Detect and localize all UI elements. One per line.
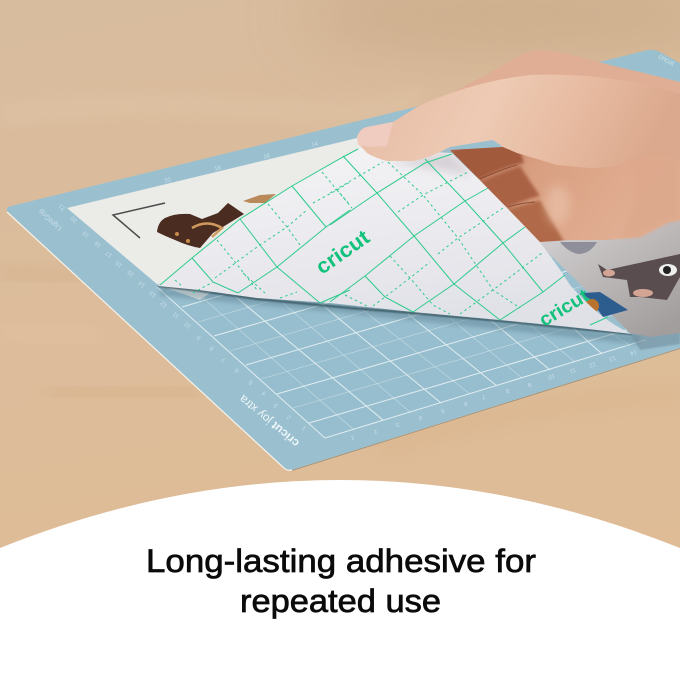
mat ruler numbers: 21 — [57, 202, 67, 211]
gray ear illustration — [560, 242, 597, 254]
mat ruler numbers: 1 — [301, 424, 308, 431]
hand peeling sheet — [357, 50, 680, 245]
mat ruler numbers: 4 — [261, 389, 268, 396]
palm highlight — [546, 185, 570, 225]
mat ruler numbers — [57, 141, 637, 441]
mat ruler numbers: 6 — [234, 366, 241, 373]
curled fingers in shade — [450, 147, 566, 242]
shadow from hand on sheet — [385, 153, 472, 175]
mat side label: LightGrip — [38, 207, 63, 232]
mat ruler numbers: 8 — [209, 344, 216, 351]
mat ruler numbers: 15 — [126, 268, 136, 277]
mat ruler numbers: 5 — [248, 378, 255, 385]
palm — [450, 147, 680, 242]
mat ruler numbers: 17 — [104, 249, 114, 258]
peeled liner sheet — [158, 148, 632, 334]
mat ruler numbers: 2 — [286, 413, 293, 420]
small green cricut logo at corner: cricut — [536, 285, 593, 331]
mat ruler numbers: 1 — [349, 434, 355, 441]
lower hand shading — [620, 156, 680, 238]
mat ruler numbers: 7 — [480, 393, 486, 400]
mat ruler numbers: 16 — [114, 259, 124, 268]
mat ruler numbers: 14 — [137, 279, 147, 288]
mat ruler numbers: 6 — [462, 400, 468, 407]
mat ruler numbers: 10 — [183, 320, 193, 329]
caption: Long-lasting adhesive for — [146, 543, 536, 579]
mat ruler numbers: 18 — [93, 239, 103, 248]
mat ruler numbers: 3 — [273, 401, 280, 408]
mat ruler numbers: 2 — [372, 428, 378, 435]
index finger — [417, 50, 680, 115]
mat ruler numbers: 7 — [221, 355, 228, 362]
mat ruler numbers: 12 — [159, 299, 169, 308]
blue bandana illustration — [582, 292, 628, 317]
white curved caption panel — [0, 480, 680, 680]
mat ruler numbers: 11 — [568, 366, 576, 374]
dog illustration — [157, 194, 276, 248]
mat ruler numbers: 11 — [172, 310, 181, 319]
mat grid — [157, 205, 645, 438]
dog face illustration — [598, 254, 680, 300]
solid green grid — [160, 149, 608, 325]
thumb nail — [357, 122, 393, 147]
green cricut logo on sheet: cricut — [312, 226, 374, 279]
mat ruler numbers: 5 — [439, 407, 445, 414]
mat ruler numbers: 13 — [608, 354, 616, 362]
caption: repeated use — [240, 583, 441, 619]
mat ruler numbers: 4 — [417, 414, 423, 421]
mat ruler numbers: 18 — [214, 165, 222, 173]
mat ruler numbers: 14 — [311, 141, 319, 149]
shaded mat squares — [157, 287, 645, 438]
caption — [146, 543, 536, 619]
mat ruler numbers: 3 — [394, 421, 400, 428]
dashed green grid — [175, 162, 542, 314]
mat ruler numbers: 16 — [263, 153, 271, 161]
mat ruler numbers: 10 — [547, 372, 555, 380]
mat ruler numbers: 9 — [526, 381, 532, 388]
mat ruler numbers: 19 — [81, 229, 91, 238]
thumb and back of hand — [357, 75, 680, 168]
mat ruler numbers: 20 — [164, 177, 172, 185]
mat ruler numbers: 13 — [148, 289, 158, 298]
shadow cast by lifted sheet on mat — [158, 286, 680, 350]
mat ruler numbers: 8 — [504, 387, 510, 394]
sheet underside with printed dogs — [535, 220, 680, 337]
mat base — [7, 50, 680, 470]
black chevron mark — [113, 203, 165, 238]
white printed sheet on mat — [67, 133, 400, 300]
mat ruler numbers: 12 — [588, 360, 596, 368]
finger creases — [480, 165, 535, 207]
mat ruler numbers: 9 — [196, 333, 203, 340]
mat ruler numbers: 14 — [629, 348, 637, 356]
mat top right label: cricut — [657, 54, 675, 68]
cutting mat — [7, 50, 680, 470]
mat ruler numbers: 20 — [69, 214, 79, 223]
mat brand text: cricut joy xtra — [237, 392, 302, 449]
